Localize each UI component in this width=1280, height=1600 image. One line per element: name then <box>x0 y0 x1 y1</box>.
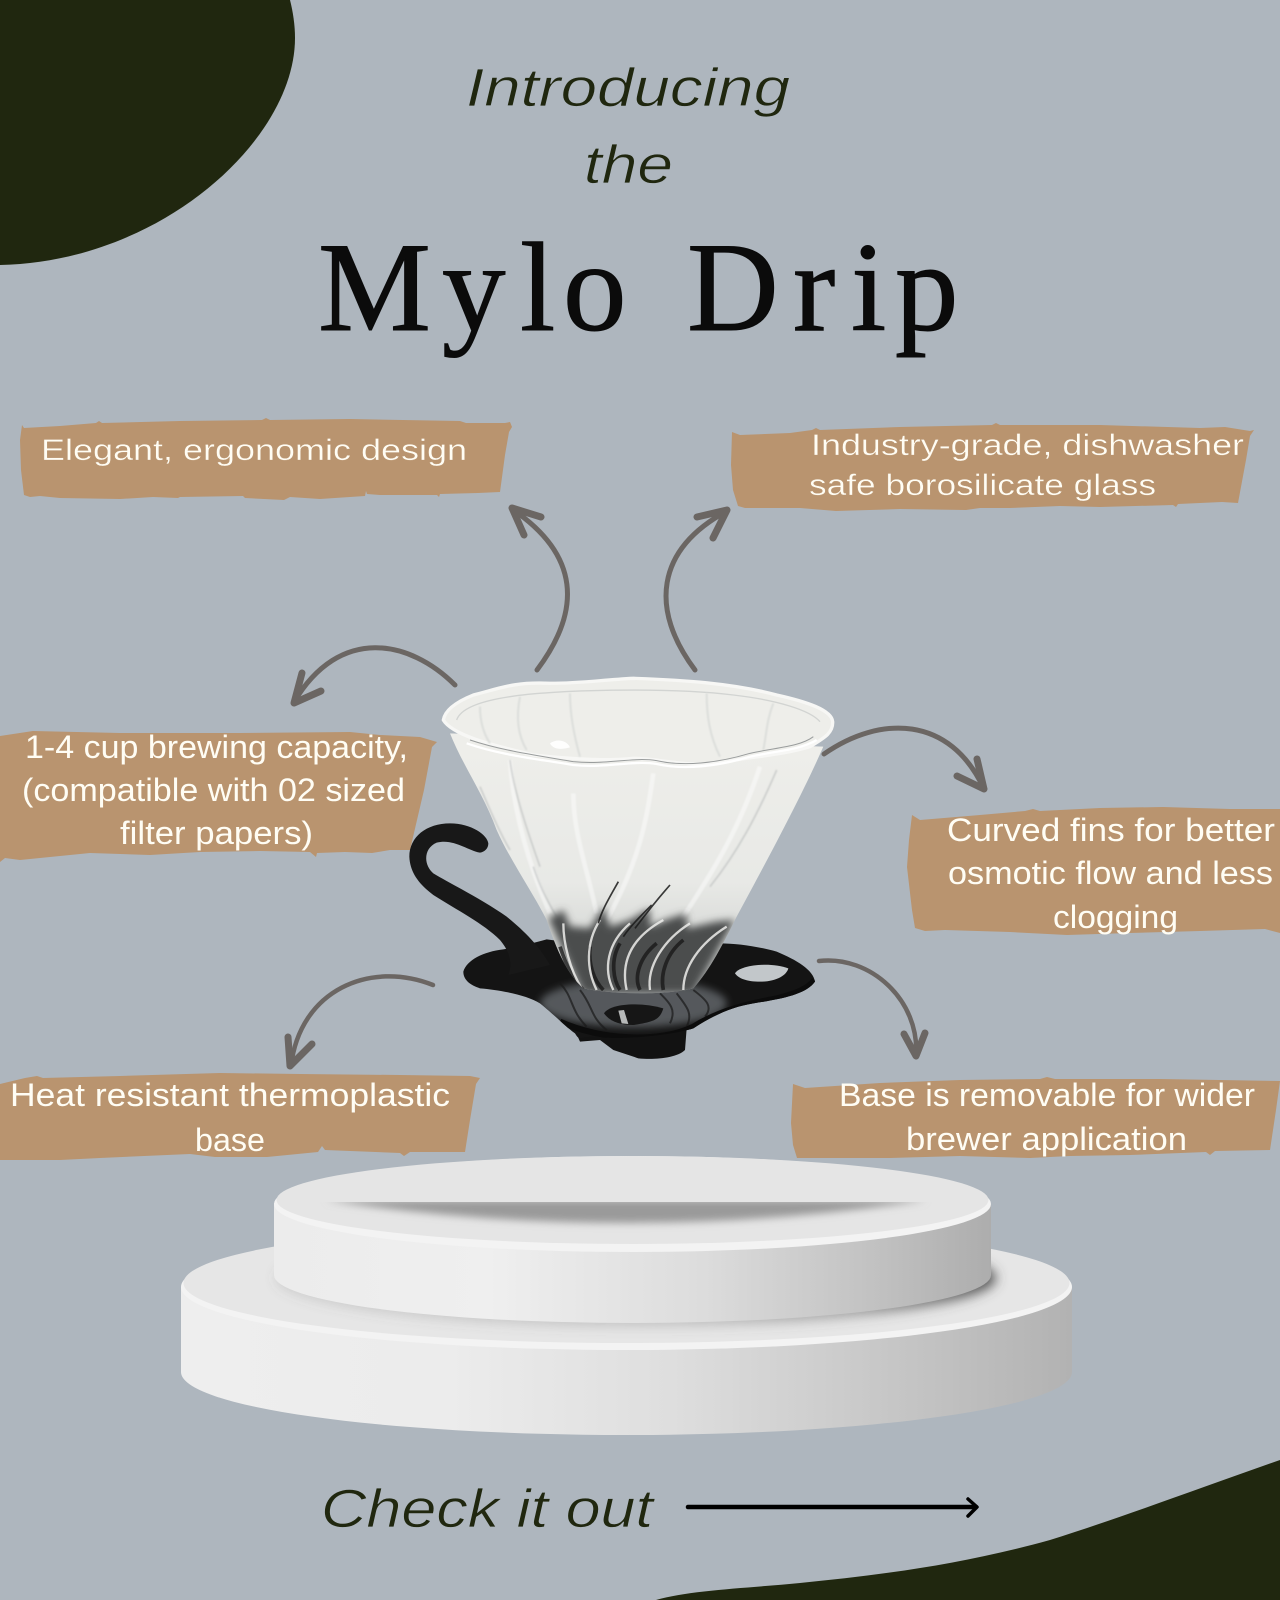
call to action <box>321 1479 977 1539</box>
panel: removable base <box>791 1077 1280 1158</box>
dripper handle <box>409 823 550 975</box>
title block <box>318 58 958 358</box>
top shadow <box>325 1200 927 1223</box>
label text: Curved fins for better <box>947 812 1275 848</box>
arrow: to removable base <box>819 960 925 1056</box>
banner shape <box>0 1073 480 1160</box>
text: Check it out: Check it out <box>321 1479 655 1539</box>
panel: brewing capacity <box>0 729 437 862</box>
podium <box>181 1156 1072 1435</box>
panel: curved fins <box>907 807 1280 935</box>
label text: Industry-grade, dishwasher <box>811 429 1244 462</box>
plate hole right <box>735 965 788 982</box>
label text: (compatible with 02 sized <box>22 772 405 808</box>
label text: base <box>195 1122 265 1158</box>
arrow: to elegant design <box>512 508 567 670</box>
glass cone <box>450 734 824 994</box>
label text: clogging <box>1053 899 1178 935</box>
dripper plate <box>463 939 815 1038</box>
banner shape <box>20 418 512 500</box>
arrow: to borosilicate glass <box>666 510 727 670</box>
label text: safe borosilicate glass <box>809 469 1156 502</box>
label text: brewer application <box>906 1121 1187 1157</box>
label text: filter papers) <box>120 815 313 851</box>
arrow: to brewing capacity <box>294 648 455 703</box>
dark swirl base <box>548 907 735 993</box>
label text: Elegant, ergonomic design <box>41 434 467 467</box>
glass rim <box>443 678 833 767</box>
plate hole front <box>604 1004 663 1025</box>
dripper foot <box>573 1027 687 1059</box>
label text: Heat resistant thermoplastic <box>10 1077 450 1113</box>
heading: the: the <box>584 135 673 195</box>
arrow: to thermoplastic base <box>288 976 433 1066</box>
label text: 1-4 cup brewing capacity, <box>25 729 408 765</box>
arrow: to curved fins <box>824 728 984 789</box>
banner shape <box>731 423 1254 511</box>
lower tier <box>181 1246 1072 1435</box>
upper tier <box>274 1156 991 1323</box>
product: glass dripper <box>409 678 850 1059</box>
arrow: call to action <box>688 1499 977 1516</box>
cast shadow <box>276 1260 1004 1330</box>
label text: Base is removable for wider <box>839 1077 1255 1113</box>
banner shape <box>907 807 1280 935</box>
panel: borosilicate glass <box>731 423 1254 511</box>
corner shape: bottom right <box>656 1460 1280 1600</box>
panel: thermoplastic base <box>0 1073 480 1160</box>
heading: Mylo Drip: Mylo Drip <box>318 218 958 358</box>
heading: Introducing: Introducing <box>466 58 790 118</box>
banner shape <box>791 1077 1280 1158</box>
label text: osmotic flow and less <box>948 855 1273 891</box>
corner shape: top left <box>0 0 295 265</box>
banner shape <box>0 731 437 862</box>
panel: elegant design <box>20 418 512 500</box>
